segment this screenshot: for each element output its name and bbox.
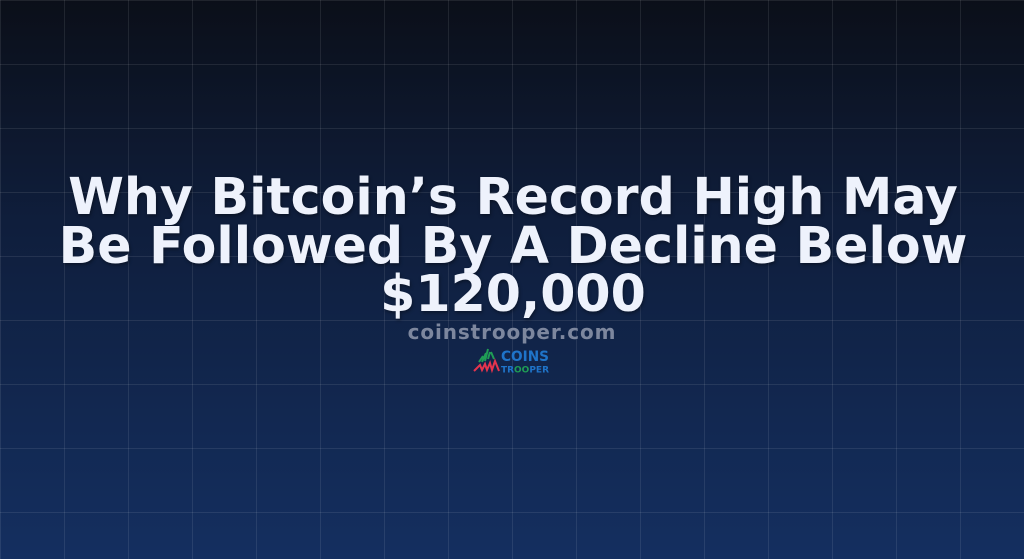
website label: coinstrooper.com — [408, 320, 616, 344]
logo: Coins Trooper — [473, 348, 549, 374]
title: Why Bitcoin’s Record High May — [68, 167, 958, 226]
title: Be Followed By A Decline Below — [59, 216, 967, 275]
logo wordmark: COINS — [501, 349, 549, 365]
title — [59, 167, 967, 323]
logo wordmark — [501, 349, 549, 376]
title: $120,000 — [380, 264, 646, 323]
icon: green and red market peaks — [474, 349, 499, 371]
